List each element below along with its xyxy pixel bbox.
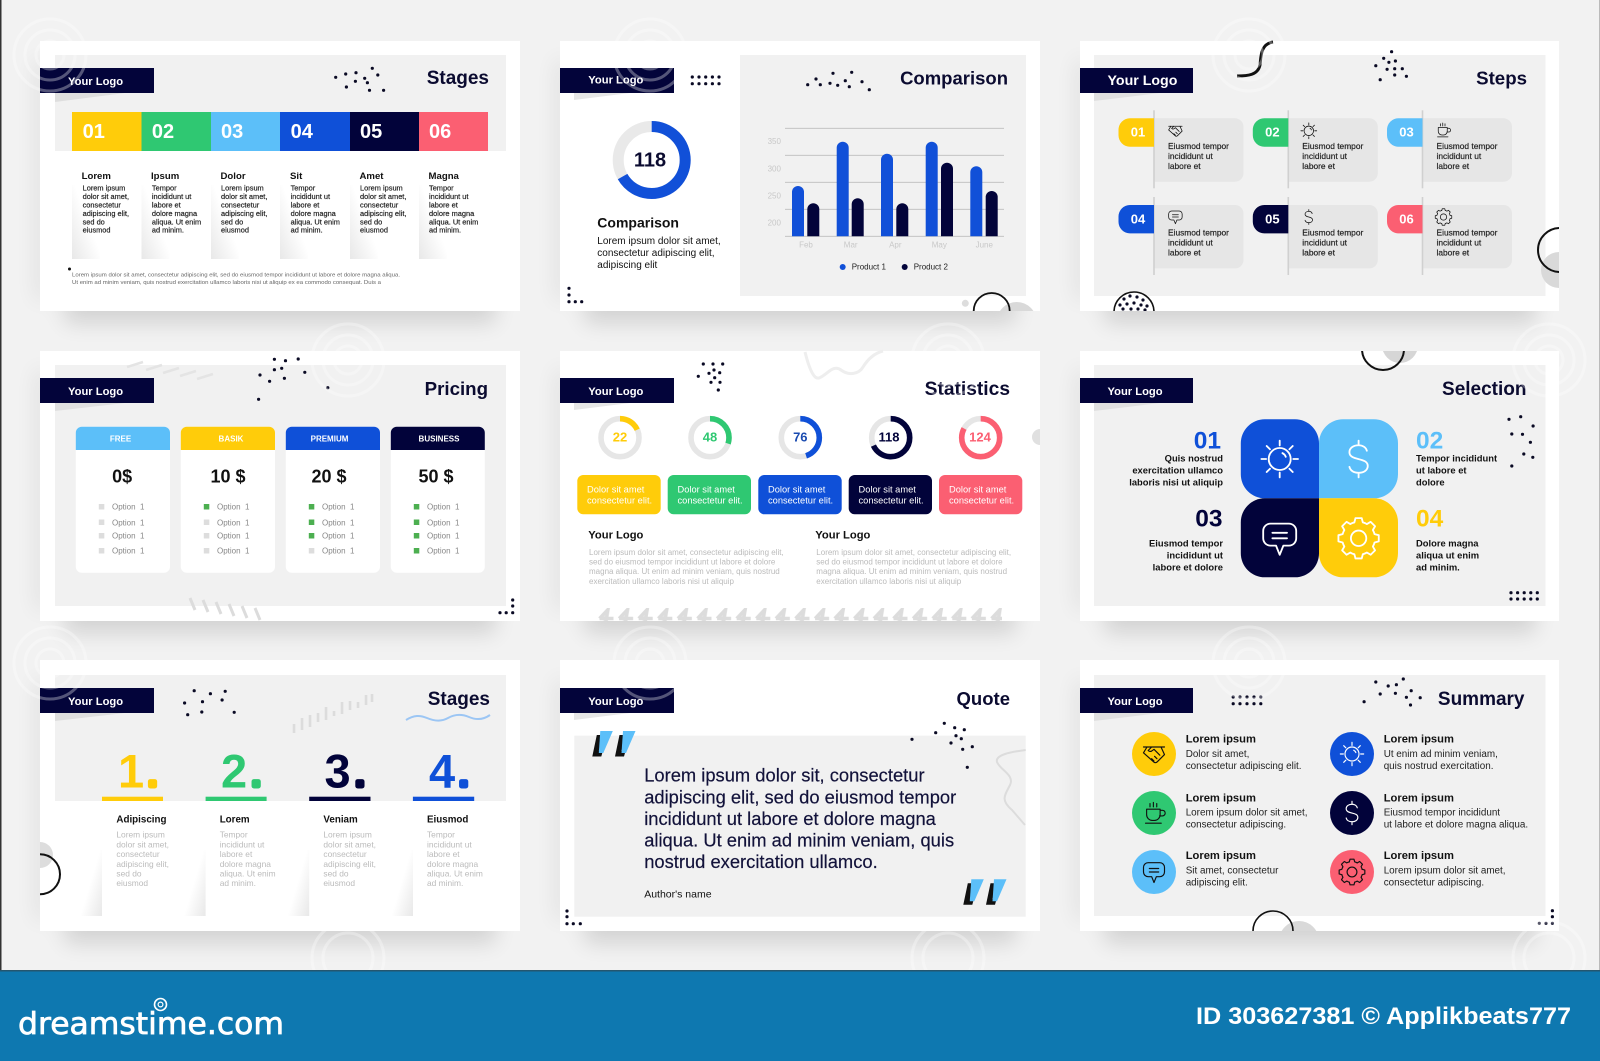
column text: dolor sit amet, xyxy=(221,192,267,201)
stage 3: sed do xyxy=(323,868,349,878)
item: cup xyxy=(1132,791,1308,835)
panel: quote xyxy=(560,660,1040,931)
column text: Lorem ipsum xyxy=(221,184,264,193)
stage 2: Lorem xyxy=(220,815,250,826)
quote text: nostrud exercitation ullamco. xyxy=(644,851,878,872)
column text: Lorem ipsum xyxy=(360,184,403,193)
column text: adipiscing elit, xyxy=(360,209,406,218)
heading: Quote xyxy=(957,688,1010,709)
stage 1: consectetur xyxy=(116,849,160,859)
column text: consectetur xyxy=(360,200,399,210)
step 02: 02 xyxy=(1265,125,1280,140)
step 03: incididunt ut xyxy=(1436,151,1482,161)
column text: sed do xyxy=(360,217,382,226)
item: cup: consectetur adipiscing. xyxy=(1186,820,1286,831)
quote text: aliqua. Ut enim ad minim veniam, quis xyxy=(644,830,954,850)
text block left: Your Logo xyxy=(588,529,644,541)
item 02: 02 xyxy=(1416,427,1443,454)
step 03: Eiusmod tempor xyxy=(1436,141,1498,151)
stage 2: Tempor xyxy=(220,830,248,840)
donuts row: 124 xyxy=(969,430,992,445)
item 04: 04 xyxy=(1416,506,1444,533)
plan: business: Option 1 xyxy=(427,547,460,556)
column text: Amet xyxy=(360,171,384,182)
logo bar xyxy=(560,688,674,713)
stage 3: Lorem ipsum xyxy=(323,830,372,840)
plan: basik xyxy=(181,427,275,573)
plan: free: Option 1 xyxy=(112,503,145,512)
item: chat: Lorem ipsum xyxy=(1186,850,1256,862)
text block left: magna aliqua. Ut enim ad minim veniam, quis nostrud xyxy=(589,567,780,576)
heading: Steps xyxy=(1476,67,1527,88)
step 03: labore et xyxy=(1436,161,1470,171)
item: dollar: Lorem ipsum xyxy=(1384,792,1454,804)
column text: Dolor xyxy=(220,171,246,182)
chart legend: Product 1 xyxy=(852,262,886,272)
item: gear: Lorem ipsum xyxy=(1384,850,1454,862)
stage 4: . xyxy=(459,760,468,793)
stage 3: Veniam xyxy=(323,815,358,826)
item 04: Dolore magna xyxy=(1416,538,1479,549)
step 05: labore et xyxy=(1302,248,1336,258)
stage 3: adipiscing elit, xyxy=(323,859,376,869)
column text: Tempor xyxy=(152,184,177,193)
column text: adipiscing elit, xyxy=(83,209,129,218)
panel: stages 2 (four big numerals) xyxy=(20,660,520,931)
column text: adipiscing elit, xyxy=(221,209,267,218)
stage 3 xyxy=(309,745,376,888)
column text: sed do xyxy=(221,217,243,226)
column text: incididunt ut xyxy=(429,192,468,201)
stage 2: dolore magna xyxy=(220,859,271,869)
quote text: adipiscing elit, sed do eiusmod tempor xyxy=(644,786,956,807)
column text: labore et xyxy=(152,200,181,210)
logo bar: Your Logo xyxy=(588,74,644,86)
coloured label boxes: Dolor sit amet xyxy=(768,485,826,495)
plan: basik: BASIK xyxy=(219,435,244,444)
step 02 xyxy=(1253,110,1378,188)
logo bar: Your Logo xyxy=(588,386,644,398)
stage 1 xyxy=(102,745,169,888)
donuts row: 118 xyxy=(879,430,899,445)
column text: Tempor xyxy=(429,184,454,193)
chart legend xyxy=(840,262,948,272)
plan: business: Option 1 xyxy=(427,503,460,512)
item: cup: Lorem ipsum xyxy=(1186,792,1256,804)
stage 4 xyxy=(413,745,483,888)
step 05: incididunt ut xyxy=(1302,238,1348,248)
item 02: dolore xyxy=(1416,477,1445,488)
plan: business: 50 $ xyxy=(418,467,454,487)
panel: summary (six icon items) xyxy=(1080,660,1559,961)
item 03: 03 xyxy=(1195,506,1222,533)
item: cup: Lorem ipsum dolor sit amet, xyxy=(1186,808,1308,819)
item 04 xyxy=(1416,506,1479,573)
step 03: 03 xyxy=(1399,125,1414,140)
item: gear xyxy=(1330,850,1506,894)
column text: eiusmod xyxy=(221,226,249,235)
coloured label boxes xyxy=(577,475,1022,514)
logo bar: Your Logo xyxy=(68,386,123,398)
item: sun: Lorem ipsum xyxy=(1384,734,1454,746)
column text: ad minim. xyxy=(291,226,323,235)
step 02: labore et xyxy=(1302,161,1336,171)
item 01: exercitation ullamco xyxy=(1132,465,1223,476)
author: Author's name xyxy=(644,889,712,901)
column text: Magna xyxy=(428,171,460,182)
logo bar xyxy=(40,68,154,93)
plan: free xyxy=(76,427,170,573)
panel: stages (six colour columns) xyxy=(40,41,520,311)
coloured label boxes: Dolor sit amet xyxy=(858,485,916,495)
comparison text: consectetur adipiscing elit, xyxy=(597,248,715,259)
stage 2 xyxy=(206,745,276,888)
logo bar xyxy=(1080,68,1193,93)
coloured label boxes: consectetur elit. xyxy=(768,495,833,505)
donuts row: 22 xyxy=(613,430,627,445)
column text: dolore magna xyxy=(291,209,337,218)
plan: free: Option 1 xyxy=(112,518,145,527)
item: dollar: Eiusmod tempor incididunt xyxy=(1384,808,1500,819)
column text: aliqua. Ut enim xyxy=(429,217,478,226)
step 04: labore et xyxy=(1168,248,1201,258)
item 03: Eiusmod tempor xyxy=(1149,538,1223,549)
plan: basik: Option 1 xyxy=(217,547,250,556)
plan: basik: Option 1 xyxy=(217,503,250,512)
panel: selection (four-quadrant tiles) xyxy=(1080,327,1559,621)
donut 118: 118 xyxy=(634,150,666,172)
quote text: Lorem ipsum dolor sit, consectetur xyxy=(644,765,925,786)
column text: dolore magna xyxy=(152,209,198,218)
quadrant tiles with icons xyxy=(1241,419,1398,577)
step 04: 04 xyxy=(1131,211,1146,226)
text block right xyxy=(815,529,1011,586)
bar chart: 200 xyxy=(768,218,782,227)
chart legend: Product 2 xyxy=(914,262,948,272)
column text: ad minim. xyxy=(429,226,461,235)
heading: Comparison xyxy=(900,67,1008,88)
stage 3: eiusmod xyxy=(323,878,355,888)
donuts row: 76 xyxy=(793,430,808,445)
colour number bar: 01 xyxy=(83,121,105,143)
comparison text: adipiscing elit xyxy=(597,260,658,271)
bar chart: 250 xyxy=(768,191,782,200)
text block left: Lorem ipsum dolor sit amet, consectetur adipiscing elit, xyxy=(589,548,784,557)
heading: Selection xyxy=(1442,379,1526,400)
column text: incididunt ut xyxy=(291,192,330,201)
logo bar: Your Logo xyxy=(1108,696,1163,708)
brand wordmark: dreamstime.com xyxy=(18,1007,284,1042)
item 01: laboris nisi ut aliquip xyxy=(1129,477,1223,488)
stage 4: Eiusmod xyxy=(427,815,468,826)
plan: premium: Option 1 xyxy=(322,532,355,541)
bar chart xyxy=(768,128,1004,272)
column text: incididunt ut xyxy=(152,192,191,201)
coloured label boxes: consectetur elit. xyxy=(949,495,1014,505)
column text: sed do xyxy=(83,217,105,226)
plan: business: Option 1 xyxy=(427,518,460,527)
step 04: incididunt ut xyxy=(1168,238,1213,248)
step 06 xyxy=(1387,197,1512,275)
plan: premium xyxy=(286,427,380,573)
panel: comparison (donut and bar chart) xyxy=(560,41,1040,311)
stage 1: dolor sit amet, xyxy=(116,839,169,849)
footer banner xyxy=(0,970,1600,1061)
stage 1: Lorem ipsum xyxy=(116,830,165,840)
logo bar: Your Logo xyxy=(1108,386,1163,398)
item: gear: consectetur adipiscing. xyxy=(1384,878,1484,889)
plan: business: Option 1 xyxy=(427,532,460,541)
stage 3: 3 xyxy=(324,745,351,798)
plan: free: FREE xyxy=(110,435,132,444)
logo bar: Your Logo xyxy=(1108,73,1178,89)
step 06: labore et xyxy=(1436,248,1470,258)
column text xyxy=(82,171,478,235)
text block left: exercitation ullamco laboris nisi ut aliquip xyxy=(589,577,735,586)
stage 2: ad minim. xyxy=(220,878,256,888)
footnote: Lorem ipsum dolor sit amet, consectetur adipiscing elit, sed do eiusmod tempor incididunt ut labore et dolore magna aliqua. xyxy=(72,273,400,279)
icon: closing quote marks xyxy=(963,879,1006,905)
stage 4: aliqua. Ut enim xyxy=(427,868,483,878)
bar chart: Mar xyxy=(844,240,858,249)
logo bar xyxy=(1080,378,1193,403)
column text: eiusmod xyxy=(83,226,111,235)
item: dollar: ut labore et dolore magna aliqua. xyxy=(1384,820,1528,831)
column text: aliqua. Ut enim xyxy=(291,217,340,226)
text block left: sed do eiusmod tempor incididunt ut labore et dolore xyxy=(589,558,776,567)
bar chart: 300 xyxy=(768,164,782,173)
image id and credit: ID 303627381 © Applikbeats777 xyxy=(1196,1003,1571,1030)
column text: Sit xyxy=(290,171,303,182)
logo bar xyxy=(40,378,154,403)
stage 3: consectetur xyxy=(323,849,367,859)
coloured label boxes: Dolor sit amet xyxy=(587,485,645,495)
step 01: incididunt ut xyxy=(1168,151,1213,161)
column text: labore et xyxy=(429,200,458,210)
plan: business xyxy=(391,427,485,573)
item 02 xyxy=(1416,427,1497,488)
item 01: Quis nostrud xyxy=(1165,453,1223,464)
stage 3: . xyxy=(356,760,364,793)
item 02: ut labore et xyxy=(1416,465,1467,476)
step 06: incididunt ut xyxy=(1436,238,1482,248)
column text: dolore magna xyxy=(429,209,475,218)
comparison text: Lorem ipsum dolor sit amet, xyxy=(597,236,721,247)
coloured label boxes: Dolor sit amet xyxy=(949,485,1007,495)
item: chat: adipiscing elit. xyxy=(1186,878,1248,889)
column text: consectetur xyxy=(221,200,260,210)
item: handshake: Lorem ipsum xyxy=(1186,734,1256,746)
heading: Summary xyxy=(1438,689,1525,710)
quote text: incididunt ut labore et dolore magna xyxy=(644,808,937,829)
plan: premium: Option 1 xyxy=(322,547,355,556)
coloured label boxes: consectetur elit. xyxy=(858,495,924,505)
text block right: exercitation ullamco laboris nisi ut aliquip xyxy=(816,577,962,586)
stage 1: Adipiscing xyxy=(116,815,166,826)
plan: premium: Option 1 xyxy=(322,503,355,512)
bar chart: June xyxy=(976,240,994,249)
item: gear: Lorem ipsum dolor sit amet, xyxy=(1384,866,1506,877)
item 02: Tempor incididunt xyxy=(1416,453,1497,464)
step 02: incididunt ut xyxy=(1302,151,1348,161)
icon: opening quote marks xyxy=(592,731,636,756)
coloured label boxes: consectetur elit. xyxy=(587,495,652,505)
colour number bar: 03 xyxy=(221,121,243,143)
stage 1: . xyxy=(148,760,157,793)
stage 3: dolor sit amet, xyxy=(323,839,376,849)
item: sun: Ut enim ad minim veniam, xyxy=(1384,749,1498,760)
stage 2: labore et xyxy=(220,849,253,859)
item 03: labore et dolore xyxy=(1153,562,1223,573)
panel: pricing (four plans) xyxy=(40,351,520,621)
footnote xyxy=(68,268,400,286)
stage 1: 1 xyxy=(118,745,144,798)
logo bar xyxy=(560,68,674,93)
item: handshake xyxy=(1132,732,1302,776)
column text: consectetur xyxy=(83,200,121,210)
item 03: incididunt ut xyxy=(1167,550,1223,561)
footnote: Ut enim ad minim veniam, quis nostrud exercitation ullamco laboris nisi ut aliquip ex ea commodo consequat. Duis a xyxy=(72,280,382,286)
plan: basik: Option 1 xyxy=(217,518,250,527)
text block right: Lorem ipsum dolor sit amet, consectetur adipiscing elit, xyxy=(816,548,1011,557)
text block right: sed do eiusmod tempor incididunt ut labore et dolore xyxy=(816,558,1003,567)
column text: Tempor xyxy=(291,184,316,193)
donuts row: 48 xyxy=(703,430,717,445)
step 01: Eiusmod tempor xyxy=(1168,141,1229,151)
plan: business: BUSINESS xyxy=(419,435,460,444)
item: handshake: Dolor sit amet, xyxy=(1186,749,1249,760)
plan: basik: Option 1 xyxy=(217,532,250,541)
item: dollar xyxy=(1330,791,1528,835)
bar chart: May xyxy=(932,240,947,249)
colour number bar xyxy=(72,112,488,151)
stage 4: ad minim. xyxy=(427,878,463,888)
item 01 xyxy=(1129,427,1223,488)
heading: Statistics xyxy=(925,379,1010,400)
plan: premium: PREMIUM xyxy=(311,435,349,444)
text block right: Your Logo xyxy=(815,529,871,541)
column text: eiusmod xyxy=(360,226,388,235)
colour number bar: 05 xyxy=(360,121,382,143)
item 04: ad minim. xyxy=(1416,562,1460,573)
item: sun: quis nostrud exercitation. xyxy=(1384,761,1493,772)
panel: statistics (five donuts) xyxy=(560,351,1048,621)
step 03 xyxy=(1387,110,1512,188)
item 03 xyxy=(1149,506,1223,573)
heading: Stages xyxy=(428,689,490,710)
column text: dolor sit amet, xyxy=(83,192,129,201)
coloured label boxes: consectetur elit. xyxy=(678,495,743,505)
column text: aliqua. Ut enim xyxy=(152,217,201,226)
column text: Ipsum xyxy=(151,171,179,182)
plan: free: Option 1 xyxy=(112,532,145,541)
item: chat: Sit amet, consectetur xyxy=(1186,866,1279,877)
stage 4: labore et xyxy=(427,849,460,859)
comparison text xyxy=(597,214,721,271)
logo bar: Your Logo xyxy=(68,696,123,708)
text block left xyxy=(588,529,784,586)
bar chart: 350 xyxy=(768,137,782,146)
step 06: 06 xyxy=(1399,211,1414,226)
step 01: labore et xyxy=(1168,161,1201,171)
plan: free: Option 1 xyxy=(112,547,145,556)
coloured label boxes: Dolor sit amet xyxy=(678,485,735,495)
column text: Lorem xyxy=(82,171,111,182)
stage 1: adipiscing elit, xyxy=(116,859,169,869)
logo bar: Your Logo xyxy=(588,696,644,708)
stage 4: dolore magna xyxy=(427,859,479,869)
stage 2: 2 xyxy=(221,745,247,798)
heading: Pricing xyxy=(425,378,488,399)
stage 2: . xyxy=(252,760,260,793)
item 01: 01 xyxy=(1194,427,1221,454)
step 05: Eiusmod tempor xyxy=(1302,228,1363,238)
column text: ad minim. xyxy=(152,226,184,235)
plan: premium: 20 $ xyxy=(311,467,347,487)
colour number bar: 02 xyxy=(152,121,174,143)
logo bar: Your Logo xyxy=(68,76,123,88)
step 05: 05 xyxy=(1265,211,1280,226)
heading: Stages xyxy=(427,68,489,89)
stage 1: sed do xyxy=(116,868,142,878)
stage 4: Tempor xyxy=(427,830,455,840)
column text: dolor sit amet, xyxy=(360,192,406,201)
stage 4: incididunt ut xyxy=(427,839,472,849)
step 04: Eiusmod tempor xyxy=(1168,228,1229,238)
plan: premium: Option 1 xyxy=(322,518,355,527)
item: sun xyxy=(1330,732,1498,776)
stage 4: 4 xyxy=(429,745,455,798)
plan: free: 0$ xyxy=(112,467,132,487)
text block right: magna aliqua. Ut enim ad minim veniam, quis nostrud xyxy=(816,567,1007,576)
item: handshake: consectetur adipiscing elit. xyxy=(1186,761,1302,772)
step 06: Eiusmod tempor xyxy=(1436,228,1498,238)
stage 2: aliqua. Ut enim xyxy=(220,868,276,878)
bar chart: Apr xyxy=(889,240,902,249)
donuts row xyxy=(601,419,1000,457)
stage 1: eiusmod xyxy=(116,878,148,888)
colour number bar: 06 xyxy=(429,121,451,143)
comparison text: Comparison xyxy=(597,214,679,230)
colour number bar: 04 xyxy=(291,121,314,143)
item 04: aliqua ut enim xyxy=(1416,550,1479,561)
item: chat xyxy=(1132,850,1279,894)
step 01 xyxy=(1118,110,1244,188)
stage 2: incididunt ut xyxy=(220,839,265,849)
step 04 xyxy=(1118,197,1244,275)
column text: labore et xyxy=(291,200,319,210)
logo bar xyxy=(560,378,674,403)
logo bar xyxy=(40,688,154,713)
column text: Lorem ipsum xyxy=(83,184,125,193)
bar chart: Feb xyxy=(799,240,813,249)
step 05 xyxy=(1253,197,1378,275)
logo bar xyxy=(1080,688,1193,713)
donut 118 xyxy=(618,126,685,194)
panel: steps (six numbered tabs) xyxy=(1080,40,1559,311)
plan: basik: 10 $ xyxy=(210,467,246,487)
step 01: 01 xyxy=(1131,125,1145,140)
step 02: Eiusmod tempor xyxy=(1302,141,1363,151)
